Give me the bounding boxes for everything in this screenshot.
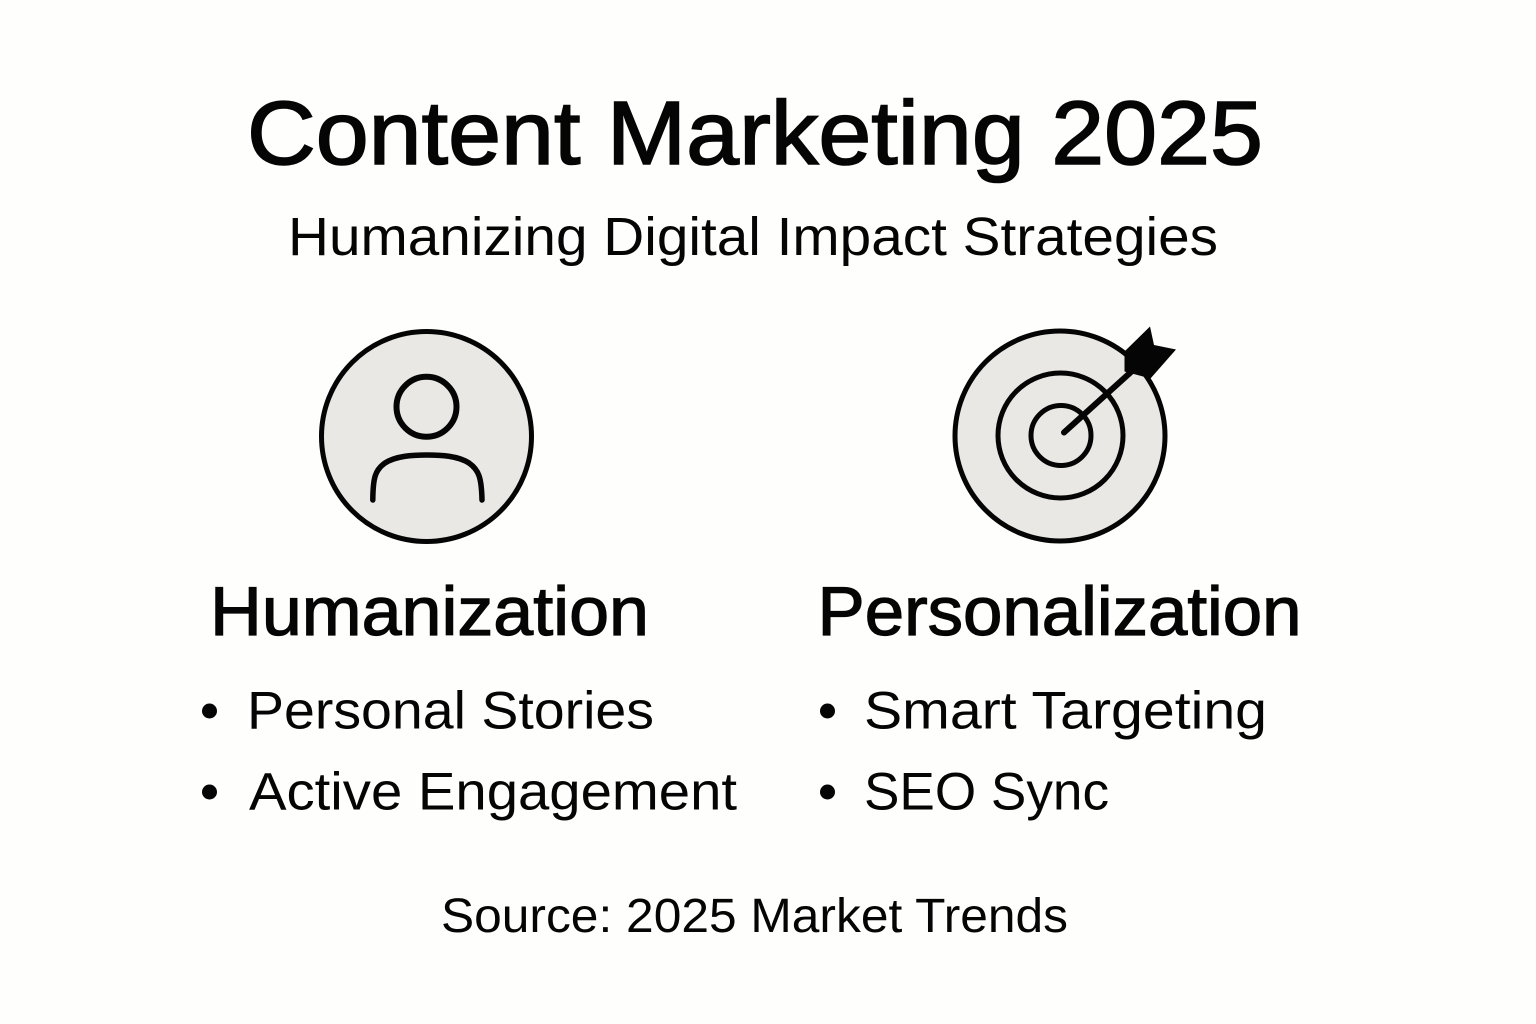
bullet: Personal Stories: Personal Stories [247, 682, 654, 740]
heading: Personalization: Personalization [818, 573, 1302, 650]
title: Content Marketing 2025 [247, 84, 1263, 184]
subtitle: Humanizing Digital Impact Strategies [288, 207, 1218, 267]
icon: target with arrow [955, 326, 1176, 541]
bullet: Active Engagement: Active Engagement [249, 762, 737, 822]
bullet list: humanization [202, 682, 737, 822]
panel: humanization [202, 332, 737, 822]
bullet: SEO Sync: SEO Sync [864, 762, 1109, 822]
source note: Source: 2025 Market Trends [441, 890, 1068, 943]
icon: person [322, 332, 532, 542]
bullet list: personalization [820, 682, 1267, 822]
bullet: Smart Targeting: Smart Targeting [864, 682, 1267, 740]
heading: Humanization: Humanization [210, 573, 649, 650]
panel: personalization [818, 326, 1302, 822]
